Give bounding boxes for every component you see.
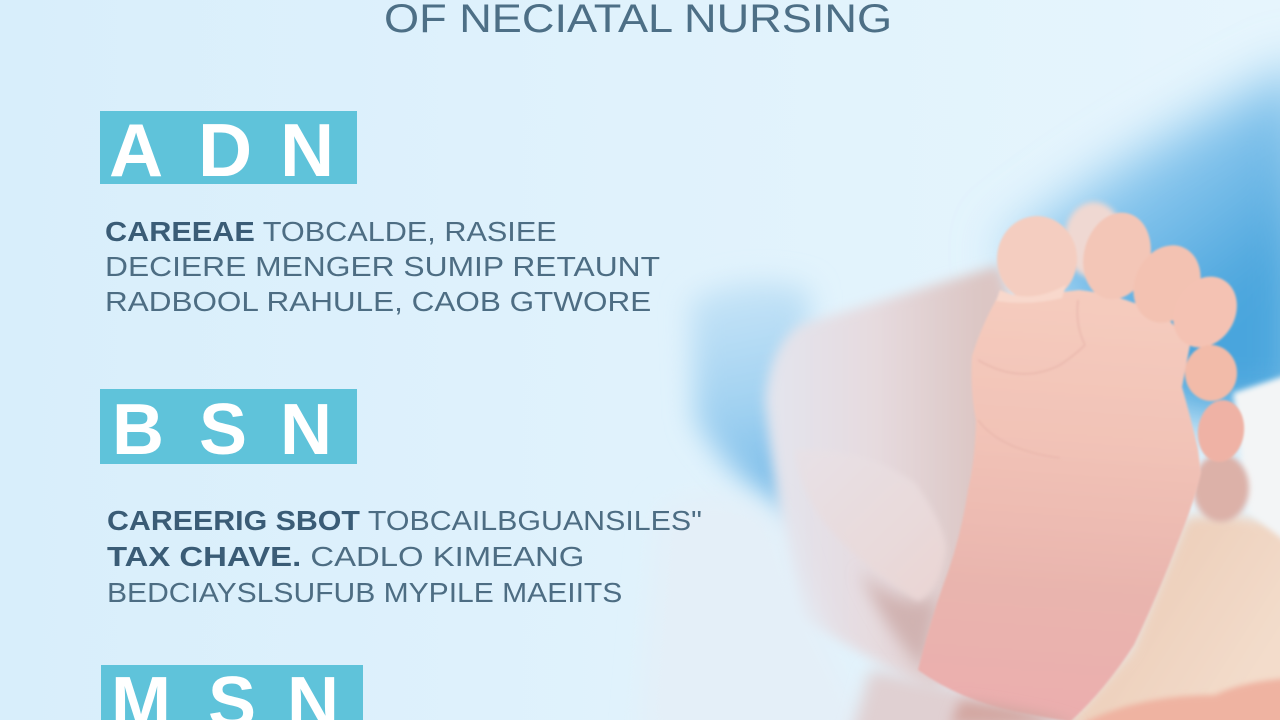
blue cloth areas (1000, 60, 1280, 420)
text block: ADN details (105, 216, 660, 317)
foot sole and toes (918, 205, 1249, 720)
white cloth (1233, 374, 1280, 545)
text block: ADN details: RADBOOL RAHULE, CAOB GTWORE (105, 286, 651, 317)
badge: MSN (101, 665, 363, 720)
panel: ADN (100, 111, 660, 317)
lower mist under foot (850, 670, 1060, 720)
adult thumb (795, 449, 946, 601)
foot base shading (950, 700, 1080, 720)
text block: BSN details: CAREERIG SBOT TOBCAILBGUANSILES" (107, 505, 702, 536)
adult hand (765, 265, 1040, 690)
hidden toe behind (1064, 202, 1124, 278)
text block: BSN details (107, 505, 702, 608)
text block: BSN details: TAX CHAVE. CADLO KIMEANG (107, 541, 584, 572)
sole creases (978, 300, 1085, 458)
mist lower left (640, 496, 880, 720)
fingers bottom right (1085, 678, 1280, 720)
badge: BSN (100, 389, 357, 464)
badge: ADN (100, 111, 357, 184)
right supporting hand (1060, 515, 1280, 720)
text block: ADN details: CAREEAE TOBCALDE, RASIEE (105, 216, 557, 247)
panel: BSN (100, 389, 702, 608)
shadow under thumb (860, 570, 938, 670)
text block: ADN details: DECIERE MENGER SUMIP RETAUNT (105, 251, 660, 282)
text block: BSN details: BEDCIAYSLSUFUB MYPILE MAEIITS (107, 577, 622, 608)
